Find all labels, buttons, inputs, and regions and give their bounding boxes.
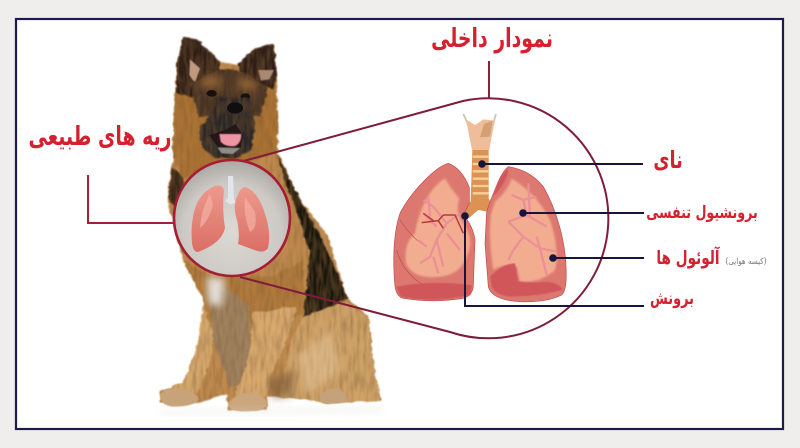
- small left lung: [192, 186, 225, 252]
- chin: [217, 147, 241, 154]
- label: respiratory bronchiole: برونشیول تنفسی: [646, 202, 758, 223]
- gap shadow between legs: [268, 370, 297, 398]
- left lung lobe line: [397, 220, 427, 285]
- black muzzle: [200, 97, 255, 159]
- heading: natural lungs: ریه های طبیعی: [28, 122, 172, 152]
- trachea ring marks: [463, 157, 502, 224]
- left inner ear: [189, 59, 200, 83]
- right lung dark cleft: [490, 168, 563, 297]
- right brow patch: [238, 77, 258, 92]
- chest fur: [183, 260, 303, 327]
- lung highlights: [200, 194, 256, 232]
- right lung: [485, 167, 566, 302]
- dog photo illustration: [160, 37, 383, 415]
- label: air sac note: (کیسه هوایی): [726, 256, 766, 266]
- left lung inner pale area: [406, 178, 470, 277]
- larynx horns: [463, 114, 496, 125]
- black saddle on back: [277, 155, 347, 320]
- small trachea: [225, 176, 237, 204]
- left ear: [176, 37, 220, 98]
- label: trachea: نای: [653, 145, 683, 174]
- larynx: [466, 119, 495, 150]
- right eye: [241, 93, 250, 100]
- trachea: [460, 150, 508, 228]
- forehead: [190, 69, 268, 117]
- left paw: [160, 388, 198, 407]
- right front leg: [233, 307, 297, 397]
- nose: [227, 102, 243, 114]
- heading: internal diagram: نمودار داخلی: [431, 24, 553, 54]
- lung circle inset: [174, 160, 290, 276]
- label lines and dots: [461, 160, 644, 306]
- haunch highlight: [297, 330, 340, 395]
- magnifier outline connecting dog to enlarged lungs: [240, 98, 608, 338]
- enlarged lungs illustration: [394, 114, 566, 302]
- centre paw: [228, 393, 267, 411]
- neck ruff and cheeks: [173, 70, 277, 178]
- mouth: [209, 124, 243, 148]
- right ear: [237, 44, 277, 88]
- trachea pointer: [478, 160, 643, 168]
- left eye: [207, 90, 217, 97]
- left bronchi dark vessels: [422, 213, 463, 233]
- callout line from title to magnifier: [488, 61, 490, 98]
- right inner ear: [258, 70, 274, 81]
- left lung: [394, 163, 475, 301]
- label: bronchus: برونش: [650, 288, 694, 309]
- left bronchi tree: [418, 197, 460, 273]
- bronchus pointer: [461, 212, 644, 306]
- dog body: [160, 38, 380, 410]
- bronchiole pointer: [519, 209, 644, 217]
- haunch: [280, 302, 381, 403]
- larynx opening: [480, 121, 493, 137]
- dark neck fringe: [168, 167, 183, 210]
- inner chest: [209, 283, 250, 387]
- right bronchi tree: [508, 183, 557, 275]
- callout line from heading to lung circle: [88, 175, 174, 223]
- rear paw: [320, 389, 347, 404]
- small right lung: [235, 187, 269, 252]
- label: alveoli: آلوئول ها: [656, 245, 720, 269]
- left lung base: [397, 283, 472, 300]
- inset background: [174, 160, 290, 276]
- right lung inner pale area: [490, 178, 557, 282]
- left front leg: [163, 307, 213, 393]
- alveoli pointer: [549, 254, 644, 262]
- left brow patch: [200, 75, 220, 88]
- ground shadow: [160, 407, 383, 415]
- tongue: [219, 134, 241, 146]
- white chest patch: [207, 277, 225, 307]
